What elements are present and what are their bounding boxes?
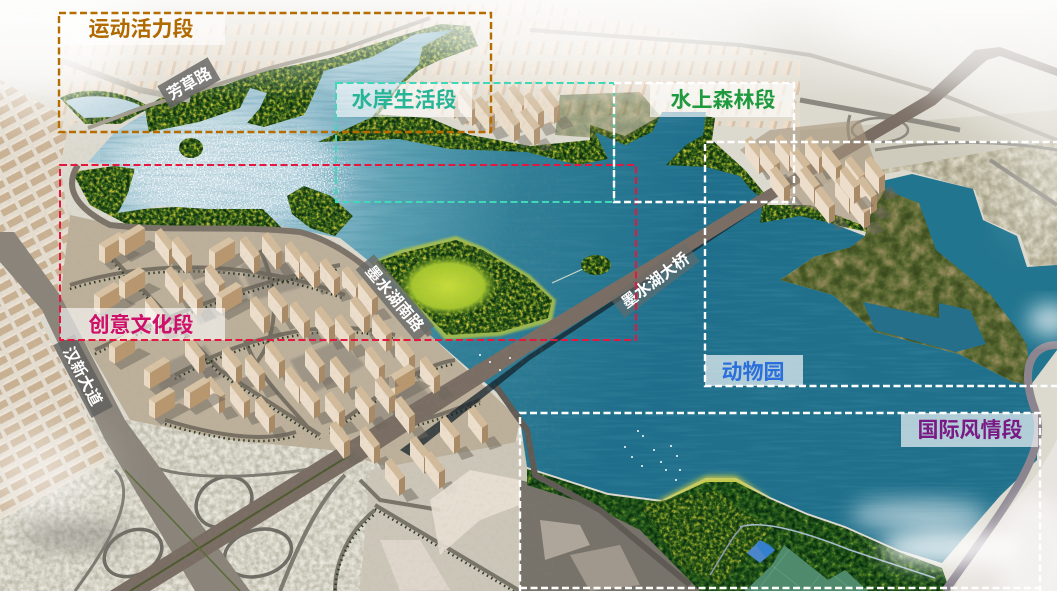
road label: 墨水湖大桥: 墨水湖大桥 <box>618 250 693 312</box>
north city blocks <box>60 0 800 130</box>
island lawn <box>400 256 496 316</box>
lake islet <box>179 138 203 158</box>
east-bridge park <box>755 205 898 238</box>
central ground patches <box>150 250 440 435</box>
ground shadow <box>20 519 130 551</box>
blue building <box>747 540 775 563</box>
section: 创意文化段 <box>60 165 636 340</box>
green park north arm <box>145 24 478 136</box>
zoo land <box>780 187 1030 385</box>
far-shore park <box>661 115 770 210</box>
NW pond <box>60 91 150 124</box>
section: 运动活力段 <box>59 13 491 132</box>
section: 水上森林段: 水上森林段 <box>670 88 776 112</box>
central peninsula island <box>372 236 611 340</box>
west city blocks <box>0 80 110 520</box>
section: 动物园: 动物园 <box>722 361 784 384</box>
north shore towers <box>440 81 574 152</box>
SW-lake park <box>72 163 285 232</box>
Hanxin Avenue road <box>0 232 250 591</box>
south pale buildings <box>380 470 640 591</box>
central district ground <box>60 215 520 470</box>
south shore park <box>527 469 950 591</box>
speckled south ground <box>0 420 527 591</box>
small island east <box>581 255 611 275</box>
east water and zoo peninsula <box>780 174 1057 390</box>
road label: 墨水湖南路 <box>356 254 434 342</box>
east road arcs <box>875 142 1057 150</box>
section: 水岸生活段: 水岸生活段 <box>352 88 456 112</box>
road label: 芳草路: 芳草路 <box>164 63 215 104</box>
section: 国际风情段: 国际风情段 <box>918 418 1022 442</box>
road label: 墨水湖南路: 墨水湖南路 <box>362 262 428 335</box>
park walkway <box>740 525 935 578</box>
water ripple <box>100 42 1030 534</box>
section: 创意文化段: 创意文化段 <box>88 313 194 337</box>
olive land north of lake <box>555 92 662 140</box>
far-east curving road <box>945 345 1057 591</box>
east land <box>880 130 1057 270</box>
water sparkles <box>106 110 362 228</box>
road label: 墨水湖大桥 <box>610 242 700 318</box>
road label: 汉新大道: 汉新大道 <box>59 344 106 409</box>
west island park <box>287 186 353 236</box>
road label: 汉新大道 <box>53 334 113 418</box>
section: 运动活力段: 运动活力段 <box>88 17 194 41</box>
clover loops <box>187 467 261 537</box>
section: 动物园 <box>705 142 1057 386</box>
section: 水上森林段 <box>614 83 794 202</box>
sports fields <box>745 545 868 591</box>
birds <box>479 354 681 481</box>
bridge shadow <box>400 184 792 456</box>
north arm lighter water <box>318 32 445 122</box>
city towers <box>740 120 899 235</box>
section: 水岸生活段 <box>336 83 614 202</box>
section: 国际风情段 <box>520 413 1040 591</box>
zoo inlet <box>863 302 986 352</box>
north shore parks <box>314 114 665 170</box>
district roads <box>70 250 520 591</box>
road label: 芳草路 <box>157 57 221 109</box>
ground mottling <box>0 60 560 591</box>
south built area <box>360 440 720 591</box>
cloud lower right <box>850 499 990 531</box>
roadside trees <box>70 254 520 591</box>
central district buildings <box>94 224 502 502</box>
lakeside road <box>72 165 430 335</box>
